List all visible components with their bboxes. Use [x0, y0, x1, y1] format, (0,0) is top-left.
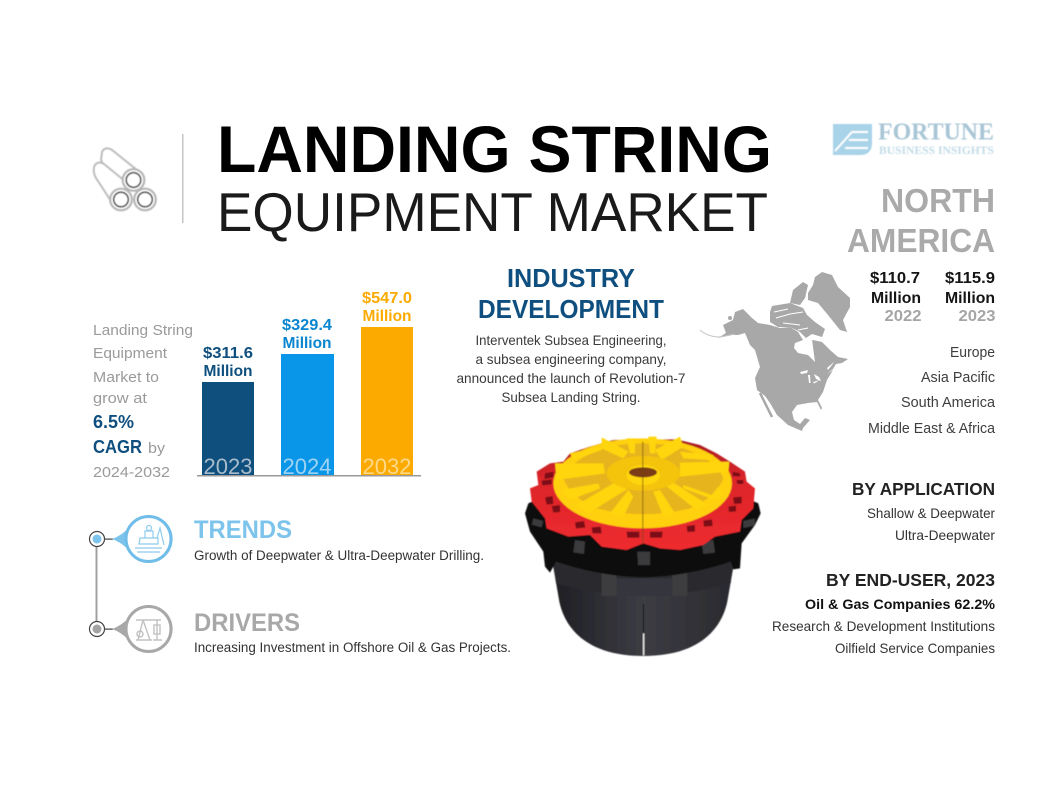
industry development text: Interventek Subsea Engineering,: [476, 332, 666, 348]
CAGR text: Landing String: [93, 322, 193, 339]
tabs: [602, 567, 687, 596]
icon: offshore rig: [135, 526, 164, 552]
regional values: [870, 270, 996, 325]
timeline connector: [96, 539, 98, 629]
bar 2023: [202, 345, 254, 479]
bar 2032: 2032: [363, 454, 411, 479]
region list: [868, 345, 996, 437]
CAGR text: grow at: [93, 390, 148, 407]
product image: landing string: [525, 437, 761, 656]
title: [217, 112, 772, 243]
trends text: Growth of Deepwater & Ultra-Deepwater Drilling.: [194, 548, 484, 563]
drivers text: Increasing Investment in Offshore Oil & Gas Projects.: [194, 640, 511, 655]
heading: North America: AMERICA: [847, 222, 995, 259]
segment: by end-user: BY END-USER, 2023: [826, 570, 995, 590]
heading: industry development: [478, 263, 664, 324]
heading: North America: NORTH: [881, 182, 995, 219]
segment: by application: BY APPLICATION: [852, 479, 995, 499]
red gear holes: [542, 472, 743, 538]
red gear: [530, 439, 755, 550]
drivers text: [194, 609, 511, 655]
bar 2024: $329.4: [282, 317, 332, 334]
yellow disc: [553, 438, 732, 528]
black ring: [525, 495, 761, 577]
regional values: 2022: [884, 308, 922, 325]
segment: by end-user: [772, 570, 996, 656]
industry development text: [456, 332, 686, 405]
yellow spokes: [555, 437, 729, 517]
bar 2024: Million: [282, 335, 332, 352]
bar 2032: $547.0: [362, 290, 412, 307]
regional values: $110.7: [870, 270, 920, 287]
map: North America: [700, 272, 850, 431]
centre bore: [629, 467, 657, 477]
segment: by end-user: Oil & Gas Companies 62.2%: [805, 596, 996, 612]
region list: South America: [901, 395, 996, 411]
industry development text: Subsea Landing String.: [502, 389, 640, 405]
segment: by application: [852, 479, 995, 543]
trends text: [194, 516, 484, 563]
region list: Europe: [950, 345, 995, 361]
drivers text: DRIVERS: [194, 609, 300, 637]
bar 2024: [281, 317, 334, 479]
segment: by application: Shallow & Deepwater: [867, 505, 995, 521]
segment: by end-user: Oilfield Service Companies: [835, 640, 995, 656]
segment: by end-user: Research & Development Institutions: [772, 618, 995, 634]
hub: [607, 456, 680, 491]
CAGR text: 6.5%: [93, 412, 134, 432]
bar 2024: 2024: [283, 454, 331, 479]
bar 2023: Million: [204, 363, 252, 380]
logo: Fortune Business Insights: FORTUNE: [878, 120, 994, 146]
title: EQUIPMENT MARKET: [217, 181, 768, 243]
lower body: [553, 563, 734, 656]
bar 2032: Million: [362, 308, 412, 325]
heading: North America: [847, 182, 995, 259]
heading: industry development: INDUSTRY: [507, 263, 635, 293]
title: LANDING STRING: [217, 112, 772, 186]
CAGR text: Equipment: [93, 345, 168, 362]
regional values: $115.9: [945, 270, 995, 287]
regional values: Million: [945, 290, 995, 307]
CAGR text: CAGR: [93, 437, 142, 457]
region list: Asia Pacific: [921, 370, 995, 386]
title divider: [182, 134, 184, 223]
CAGR text: 2024-2032: [93, 464, 170, 481]
regional values: Million: [871, 290, 921, 307]
icon: oil pump: [136, 620, 162, 640]
icon: pipes: [94, 148, 156, 210]
industry development text: announced the launch of Revolution-7: [456, 370, 686, 386]
CAGR text: by: [148, 440, 166, 457]
bar 2023: $311.6: [203, 345, 253, 362]
logo: Fortune Business Insights: [833, 120, 994, 157]
drivers node: [90, 605, 173, 653]
bar 2032: [361, 290, 413, 479]
segment: by application: Ultra-Deepwater: [895, 527, 995, 543]
bar 2023: 2023: [204, 454, 252, 479]
industry development text: a subsea engineering company,: [476, 351, 666, 367]
CAGR text: Market to: [93, 369, 159, 386]
trends text: TRENDS: [194, 516, 292, 544]
heading: industry development: DEVELOPMENT: [478, 294, 664, 324]
trends node: [90, 515, 173, 563]
region list: Middle East & Africa: [868, 421, 996, 437]
regional values: 2023: [958, 308, 996, 325]
bar chart: [197, 290, 421, 479]
CAGR text: [93, 322, 193, 481]
logo: Fortune Business Insights: BUSINESS INSIGHTS: [879, 145, 994, 157]
